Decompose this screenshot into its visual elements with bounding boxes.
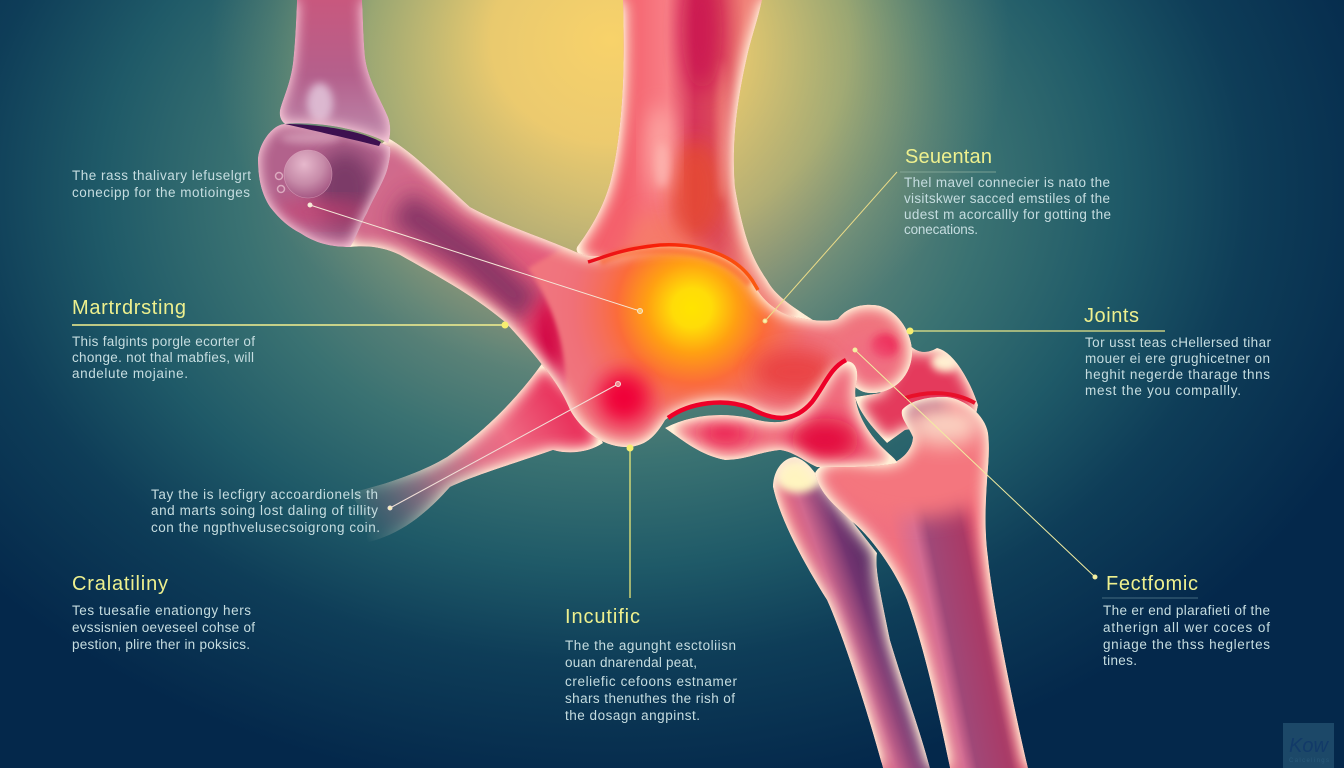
label: Incutific: shars thenuthes the rish of	[565, 691, 735, 706]
anatomical knee joint illustration	[258, 0, 1028, 768]
label: Martrdrsting: andelute mojaine.	[72, 366, 188, 381]
label: Cralatiliny: evssisnien oeveseel cohse of	[72, 620, 255, 635]
label: Joints	[1084, 305, 1272, 398]
lower red joint line	[668, 360, 846, 418]
upper red joint line	[588, 245, 758, 290]
label: lower-left note: Tay the is lecfigry accoardionels th	[151, 487, 378, 502]
label: Incutific: The the agunght esctoliisn	[565, 638, 736, 653]
label: Fectfomic	[1102, 573, 1270, 668]
label: Cralatiliny: Tes tuesafie enationgy hers	[72, 603, 251, 618]
label: Seuentan: visitskwer sacced emstiles of the	[904, 191, 1110, 206]
label: Martrdrsting	[72, 297, 255, 381]
label: Fectfomic: gniage the thss heglertes	[1103, 637, 1270, 652]
dark joint gap	[285, 124, 381, 146]
main joint body	[350, 138, 912, 447]
lower joint wedge with spike	[665, 361, 897, 467]
label: Joints: Tor usst teas cHellersed tihar	[1085, 335, 1272, 350]
label: Incutific	[565, 606, 738, 723]
label: Martrdrsting: Martrdrsting	[72, 297, 186, 319]
label: Martrdrsting: chonge. not thal mabfies, will	[72, 350, 254, 365]
label: lower-left note: con the ngpthvelusecsoigrong coin.	[151, 520, 380, 535]
label: Cralatiliny: pestion, plire ther in poksics.	[72, 637, 250, 652]
label: Fectfomic: The er end plarafieti of the	[1103, 603, 1270, 618]
lower leg bone: tibia	[815, 397, 1028, 768]
label: Joints: heghit negerde tharage thns	[1085, 367, 1270, 382]
label: Cralatiliny: Cralatiliny	[72, 573, 168, 595]
back condyle joint line	[905, 393, 975, 403]
ball head	[276, 150, 332, 198]
label: Incutific: ouan dnarendal peat,	[565, 655, 697, 670]
label: Incutific: the dosagn angpinst.	[565, 708, 700, 723]
label: Joints: mouer ei ere grughicetner on	[1085, 351, 1270, 366]
label: Martrdrsting: This falgints porgle ecorter of	[72, 334, 255, 349]
label: Joints: mest the you compallly.	[1085, 383, 1241, 398]
vertical femur shaft	[577, 0, 813, 320]
watermark badge: Kow	[1289, 735, 1329, 757]
connector lines and dots	[72, 172, 1165, 598]
label: lower-left note: and marts soing lost daling of tillity	[151, 503, 378, 518]
label: top-left note: The rass thalivary lefuselgrt	[72, 168, 251, 183]
label: Cralatiliny	[72, 573, 255, 652]
watermark badge	[1283, 723, 1334, 768]
watermark badge: Calcelings	[1289, 758, 1329, 764]
label: Fectfomic: Fectfomic	[1106, 573, 1198, 595]
lower leg bone: fibula	[773, 457, 930, 768]
label: Seuentan: Thel mavel connecier is nato the	[904, 175, 1110, 190]
label: Incutific: Incutific	[565, 606, 640, 628]
label: Seuentan: Seuentan	[905, 146, 992, 168]
label: Seuentan	[900, 146, 1111, 237]
back condyle piece	[855, 343, 978, 443]
label: Fectfomic: atherign all wer coces of	[1103, 620, 1270, 635]
label: top-left note	[72, 168, 251, 200]
label: Incutific: creliefic cefoons estnamer	[565, 674, 738, 689]
lower tail of femur	[350, 362, 603, 543]
label: Seuentan: udest m acorcallly for gotting the	[904, 207, 1111, 222]
label: Joints: Joints	[1084, 305, 1139, 327]
upper-left condyle	[258, 124, 390, 247]
label: Seuentan: conecations.	[904, 222, 978, 237]
upper-left bone shaft	[280, 0, 390, 143]
label: Fectfomic: tines.	[1103, 653, 1137, 668]
label: top-left note: conecipp for the motioinges	[72, 185, 250, 200]
label: lower-left note	[151, 487, 380, 535]
